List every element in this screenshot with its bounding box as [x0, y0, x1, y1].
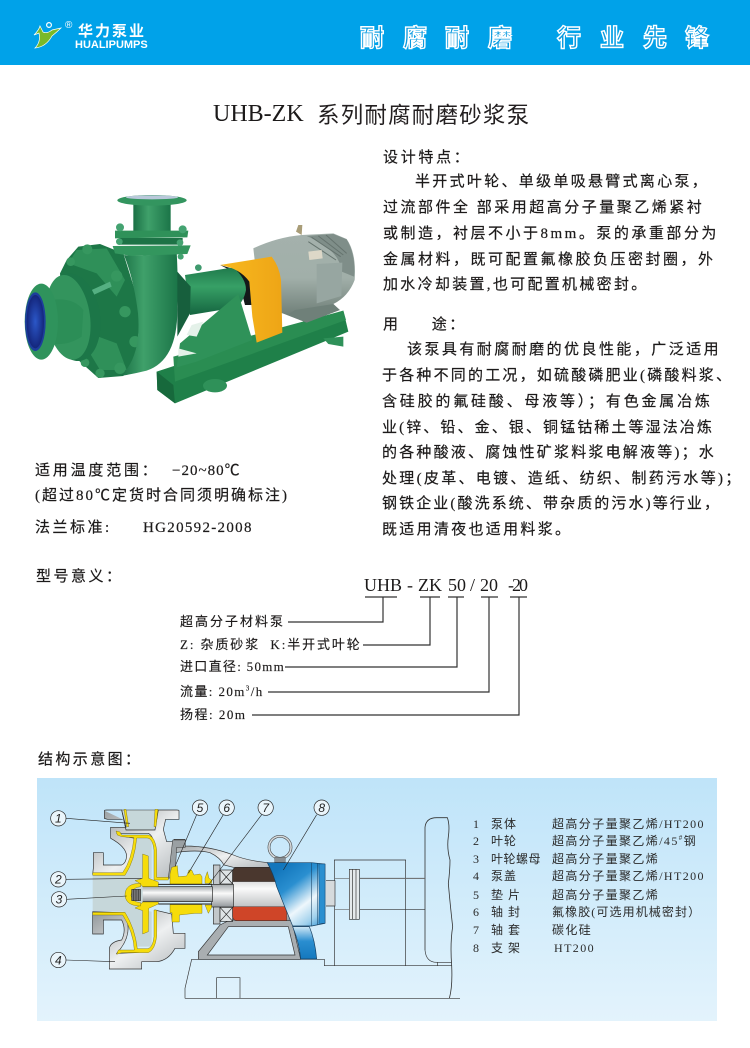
usage text: 含硅胶的氟硅酸、母液等）；有色金属冶炼: [382, 394, 713, 410]
slogan: 先: [643, 18, 667, 53]
bearing housing: [185, 267, 246, 315]
yellow lining: [93, 809, 212, 954]
top flange and neck: [133, 203, 171, 235]
design features text: 或制造，衬层不小于8mm。泵的承重部分为: [383, 226, 719, 242]
parts list: 超高分子量聚乙烯/HT200: [552, 817, 705, 831]
parts list: 8: [473, 941, 480, 955]
usage text: 该泵具有耐腐耐磨的优良性能，广泛适用: [407, 342, 721, 358]
panel: structure diagram: [37, 778, 717, 1021]
lifting ring: [269, 836, 291, 862]
parts list: 超高分子量聚乙烯: [552, 852, 659, 866]
housing wall: [213, 865, 220, 924]
shaft sleeve marks: [158, 884, 212, 904]
model code string: 50: [448, 575, 466, 595]
parts list: 超高分子量聚乙烯/HT200: [552, 869, 705, 883]
callout number text: 1: [55, 812, 62, 826]
coupling behind guard: [220, 265, 257, 305]
bearing frame lower leg: [198, 920, 301, 959]
design features text: 半开式叶轮、单级单吸悬臂式离心泵，: [415, 174, 709, 190]
support bracket: [177, 294, 252, 367]
yellow coupling guard: [220, 257, 282, 343]
parts list: 碳化硅: [552, 923, 592, 937]
parts list: 超高分子量聚乙烯/45#钢: [552, 834, 697, 848]
title: UHB-ZK: [213, 101, 304, 127]
parts list: 6: [473, 905, 480, 919]
blue bracket cover: [267, 863, 325, 926]
parts list: 3: [473, 852, 480, 866]
logo chinese name: 华力泵业: [78, 20, 146, 41]
model code string: 20: [480, 575, 498, 595]
callout numbers: [51, 800, 329, 968]
callout number text: 5: [197, 801, 204, 815]
inlet passage and volute cavity: [93, 838, 152, 947]
leader lines: [66, 815, 317, 962]
model code labels: Z: 杂质砂浆 K:半开式叶轮: [180, 637, 362, 652]
impeller nut threads: [132, 889, 141, 901]
parts list: 叶轮螺母: [491, 852, 541, 866]
motor: [253, 233, 355, 323]
right hub cover: [168, 840, 185, 878]
motor outline with break line: [425, 818, 453, 998]
parts list: 5: [473, 888, 480, 902]
parts list: 泵体: [491, 817, 517, 831]
model code labels: [180, 614, 362, 722]
lower casing: [93, 910, 185, 969]
usage text: 既适用清夜也适用料浆。: [382, 522, 572, 538]
pump product photo: [24, 195, 355, 404]
parts list: HT200: [554, 941, 595, 955]
slogan: 耐: [445, 18, 469, 53]
vertical discharge volute: [121, 252, 178, 376]
shaft: [212, 884, 233, 907]
parts list: 泵盖: [491, 869, 517, 883]
parts list: 垫 片: [491, 888, 521, 902]
model code labels: 流量: 20m3/h: [180, 684, 264, 699]
model code string: ZK: [418, 575, 442, 595]
shaft and coupling: [326, 869, 425, 919]
model code connector lines: [252, 596, 527, 716]
base and foundation outline: [185, 818, 460, 998]
icon: company logo: [34, 22, 62, 48]
callout number text: 4: [55, 953, 62, 967]
parts list: [473, 817, 705, 955]
design features heading: 设计特点：: [383, 150, 472, 166]
parts list: 2: [473, 834, 480, 848]
parts list: 超高分子量聚乙烯: [552, 888, 659, 902]
title: 系列耐腐耐磨砂浆泵: [317, 98, 530, 130]
parts list: 氟橡胶(可选用机械密封）: [552, 905, 701, 919]
logo english name: HUALIPUMPS: [75, 39, 148, 51]
seal parts lower: [170, 905, 202, 922]
header banner: [0, 0, 750, 65]
usage text: 业(锌、铅、金、银、铜锰钴稀土等湿法冶炼: [382, 420, 714, 436]
cutaway pump diagram: [50, 800, 460, 999]
inlet flanges and blue lining: [42, 270, 106, 365]
parts list: 1: [473, 817, 480, 831]
parts list: 7: [473, 923, 480, 937]
slogan: 腐: [403, 18, 427, 53]
parts list: 叶轮: [491, 834, 517, 848]
callout number text: 2: [54, 873, 62, 887]
model code string: /: [470, 575, 475, 595]
impeller nut: [125, 883, 141, 906]
usage text: 处理(皮革、电镀、造纸、纺织、制药污水等)；: [382, 471, 743, 487]
slogan: 业: [600, 18, 624, 53]
model code string: -20: [508, 575, 526, 595]
structure diagram heading: 结构示意图：: [38, 752, 142, 768]
model code string: -: [407, 575, 413, 595]
model meaning heading: 型号意义：: [36, 569, 124, 585]
usage text: 钢铁企业(酸洗系统、带杂质的污水)等行业，: [382, 496, 721, 512]
usage text: 于各种不同的工况，如硫酸磷肥业(磷酸料浆、: [382, 368, 733, 384]
callout number text: 3: [56, 893, 63, 907]
usage text: 的各种酸液、腐蚀性矿浆料浆电解液等)；水: [382, 445, 716, 461]
rear casing cover: [60, 244, 140, 378]
temperature and flange specs: [35, 462, 289, 536]
slogan: 锋: [685, 18, 709, 53]
callout number text: [54, 801, 325, 967]
design features text: 过流部件全 部采用超高分子量聚乙烯紧衬: [383, 200, 704, 216]
parts list: 轴 套: [491, 923, 521, 937]
logo registered mark: ®: [65, 20, 72, 31]
callout number text: 6: [223, 801, 230, 815]
discharge neck: [122, 810, 158, 830]
slogan: [360, 18, 710, 53]
model code labels: 进口直径: 50mm: [180, 659, 285, 674]
temperature and flange specs: 适用温度范围：: [35, 463, 160, 479]
callout number text: 8: [318, 801, 325, 815]
design features text: 加水冷却装置,也可配置机械密封。: [383, 277, 649, 293]
slogan: 耐: [360, 18, 384, 53]
parts list: 4: [473, 869, 480, 883]
temperature and flange specs: (超过80℃定货时合同须明确标注): [35, 488, 289, 504]
temperature and flange specs: −20~80℃: [172, 463, 241, 479]
slogan: 磨: [488, 18, 512, 53]
design features text: [383, 173, 719, 293]
base frame: [157, 311, 348, 403]
model code string: UHB: [364, 575, 402, 595]
seal parts upper: [170, 866, 202, 884]
impeller: [135, 854, 158, 887]
upper casing: [93, 810, 179, 878]
callout number text: 7: [262, 801, 270, 815]
cutaway motor interior: [233, 867, 296, 921]
parts list: 轴 封: [491, 905, 521, 919]
temperature and flange specs: 法兰标准:: [35, 520, 112, 536]
usage heading: 用 途：: [383, 317, 467, 333]
title: [213, 98, 530, 130]
slogan: 行: [557, 18, 581, 53]
model code string: [364, 575, 528, 595]
bearings: [220, 870, 233, 921]
model code labels: 超高分子材料泵: [180, 614, 285, 629]
design features text: 金属材料，既可配置氟橡胶负压密封圈，外: [383, 252, 716, 268]
bearing frame top: [174, 839, 273, 867]
usage text: [382, 341, 743, 538]
temperature and flange specs: HG20592-2008: [143, 520, 253, 536]
model code labels: 扬程: 20m: [180, 707, 246, 722]
parts list: 支 架: [491, 941, 521, 955]
